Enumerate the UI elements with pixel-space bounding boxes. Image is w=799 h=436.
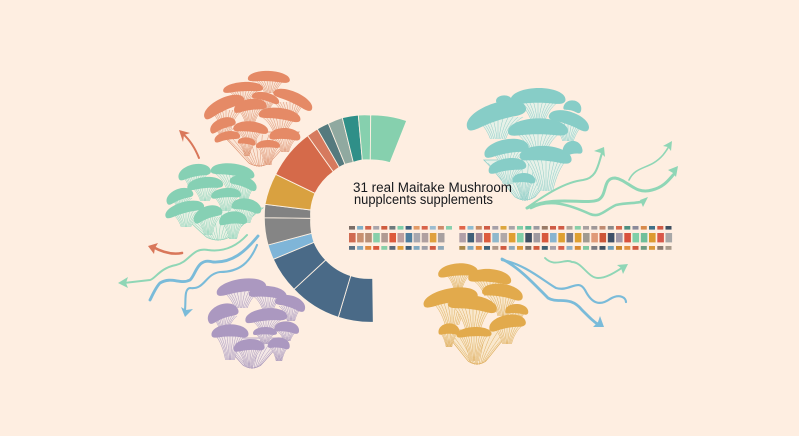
- arrow: blue wave right: [502, 260, 626, 303]
- arrow: mint up-right 2: [527, 166, 678, 208]
- arrow: orange left: [148, 243, 182, 254]
- mushroom: mint: [163, 161, 263, 241]
- arrow: mint up-right 1: [528, 147, 605, 207]
- arrow: orange up-left: [179, 130, 199, 158]
- mushroom: orange: [200, 70, 316, 167]
- arrow: mint left: [118, 235, 247, 288]
- title text: nupplcents supplements: [354, 192, 493, 207]
- arrow: blue down-right: [502, 259, 604, 327]
- arrow: blue down-left: [181, 245, 257, 317]
- title text: 31 real Maitake Mushroom: [353, 180, 512, 195]
- mushroom: purple: [204, 276, 308, 369]
- arrow: blue wave: [150, 236, 258, 300]
- title text: [353, 180, 512, 207]
- arrow: mint right: [531, 197, 648, 215]
- colour swatch strip: [349, 226, 672, 250]
- arrow: mint lower right: [545, 258, 628, 278]
- mushroom: teal: [463, 88, 592, 201]
- arrow: mint thin up-right: [629, 141, 672, 180]
- mushroom: gold: [422, 262, 529, 365]
- segmented ring chart: [264, 115, 407, 322]
